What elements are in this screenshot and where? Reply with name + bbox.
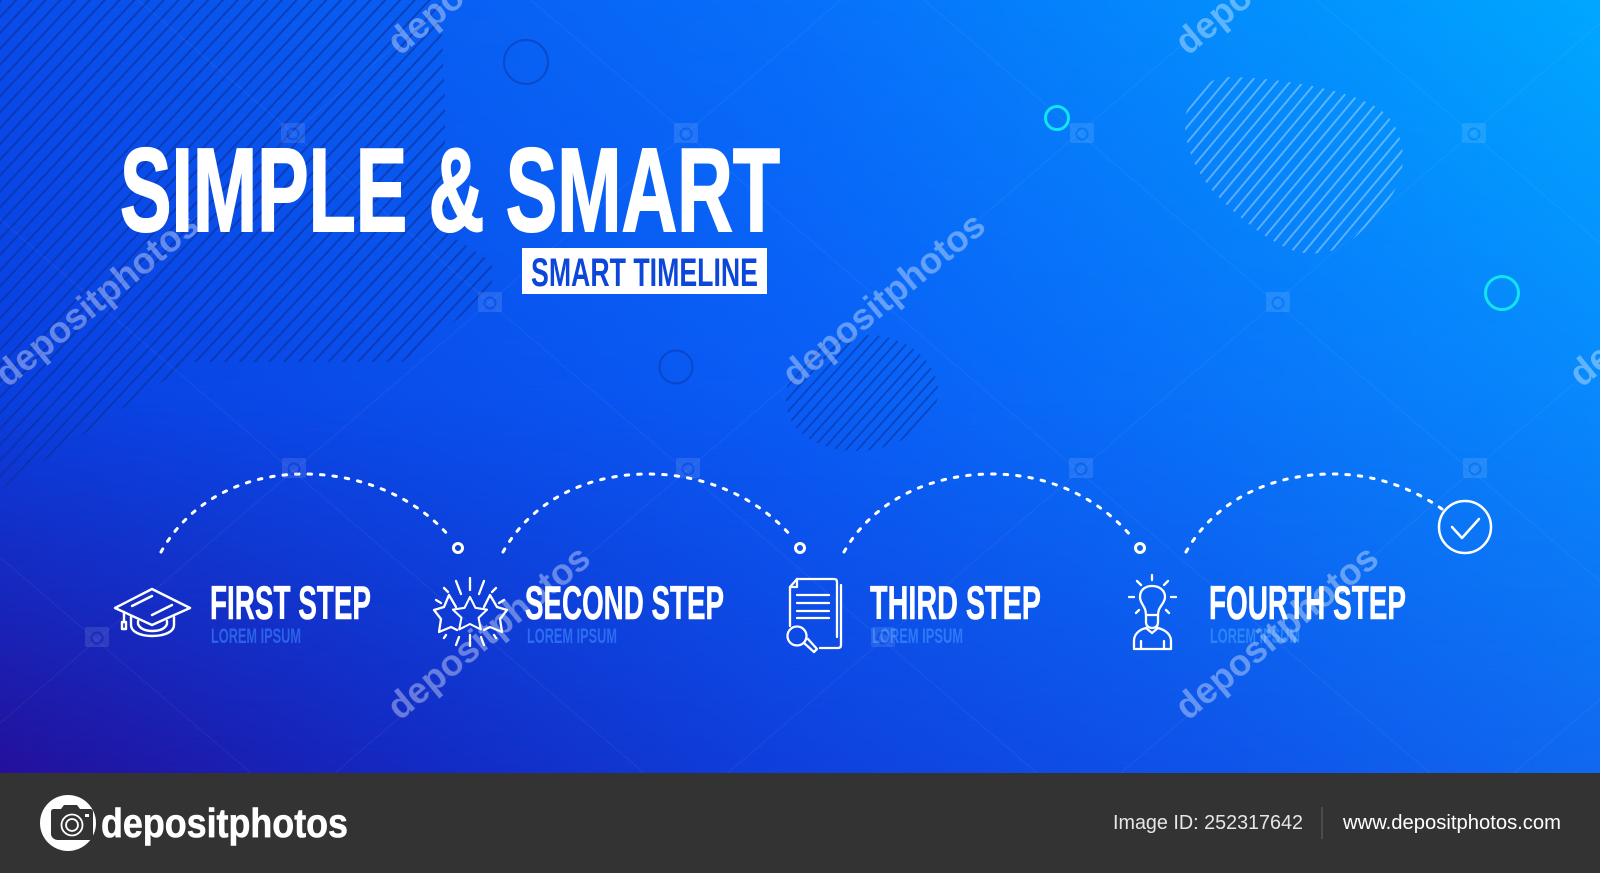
icon: person with lightbulb	[1129, 575, 1176, 649]
label: first step	[210, 576, 371, 648]
label: second step	[525, 576, 724, 648]
watermark text: depositphotos	[774, 204, 993, 394]
circle outline: cyan large	[1486, 276, 1518, 310]
label: fourth step: FOURTH STEP	[1209, 576, 1406, 629]
timeline arc 3	[844, 474, 1144, 552]
footer logo wordmark: depositphotos	[101, 800, 348, 846]
watermark text: depositphotos	[1167, 537, 1386, 727]
timeline arc 1	[161, 474, 462, 552]
striped blob: dark	[786, 335, 938, 451]
footer website: www.depositphotos.com	[1342, 812, 1561, 834]
icon: graduation cap	[115, 589, 190, 636]
label: third step	[870, 576, 1041, 648]
circle outline: dark top	[504, 40, 548, 84]
footer logo mark	[40, 795, 96, 851]
timeline arc 4	[1186, 474, 1442, 552]
circle outline: cyan small	[1046, 106, 1068, 130]
label: first step: LOREM IPSUM	[211, 625, 301, 648]
striped shape: top left	[0, 0, 492, 490]
label: fourth step	[1209, 576, 1406, 648]
badge: smart timeline	[522, 248, 767, 295]
badge: smart timeline: SMART TIMELINE	[531, 251, 758, 295]
label: third step: THIRD STEP	[870, 576, 1041, 629]
icon: three stars	[434, 578, 507, 646]
striped blob: light	[1185, 77, 1403, 254]
label: second step: SECOND STEP	[525, 576, 724, 629]
label: third step: LOREM IPSUM	[872, 625, 963, 648]
watermark cameras	[85, 123, 1487, 647]
label: first step: FIRST STEP	[210, 576, 371, 629]
label: fourth step: LOREM IPSUM	[1210, 625, 1300, 648]
circle outline: dark middle	[660, 350, 692, 384]
timeline arc 2	[503, 474, 804, 552]
label: second step: LOREM IPSUM	[527, 625, 617, 648]
title: SIMPLE & SMART	[120, 124, 780, 257]
watermark text: depositphotos	[379, 537, 598, 727]
footer bar	[0, 773, 1600, 873]
footer image id: Image ID: 252317642	[1113, 812, 1303, 834]
icon: check circle	[1439, 501, 1491, 553]
icon: document search	[788, 579, 841, 652]
